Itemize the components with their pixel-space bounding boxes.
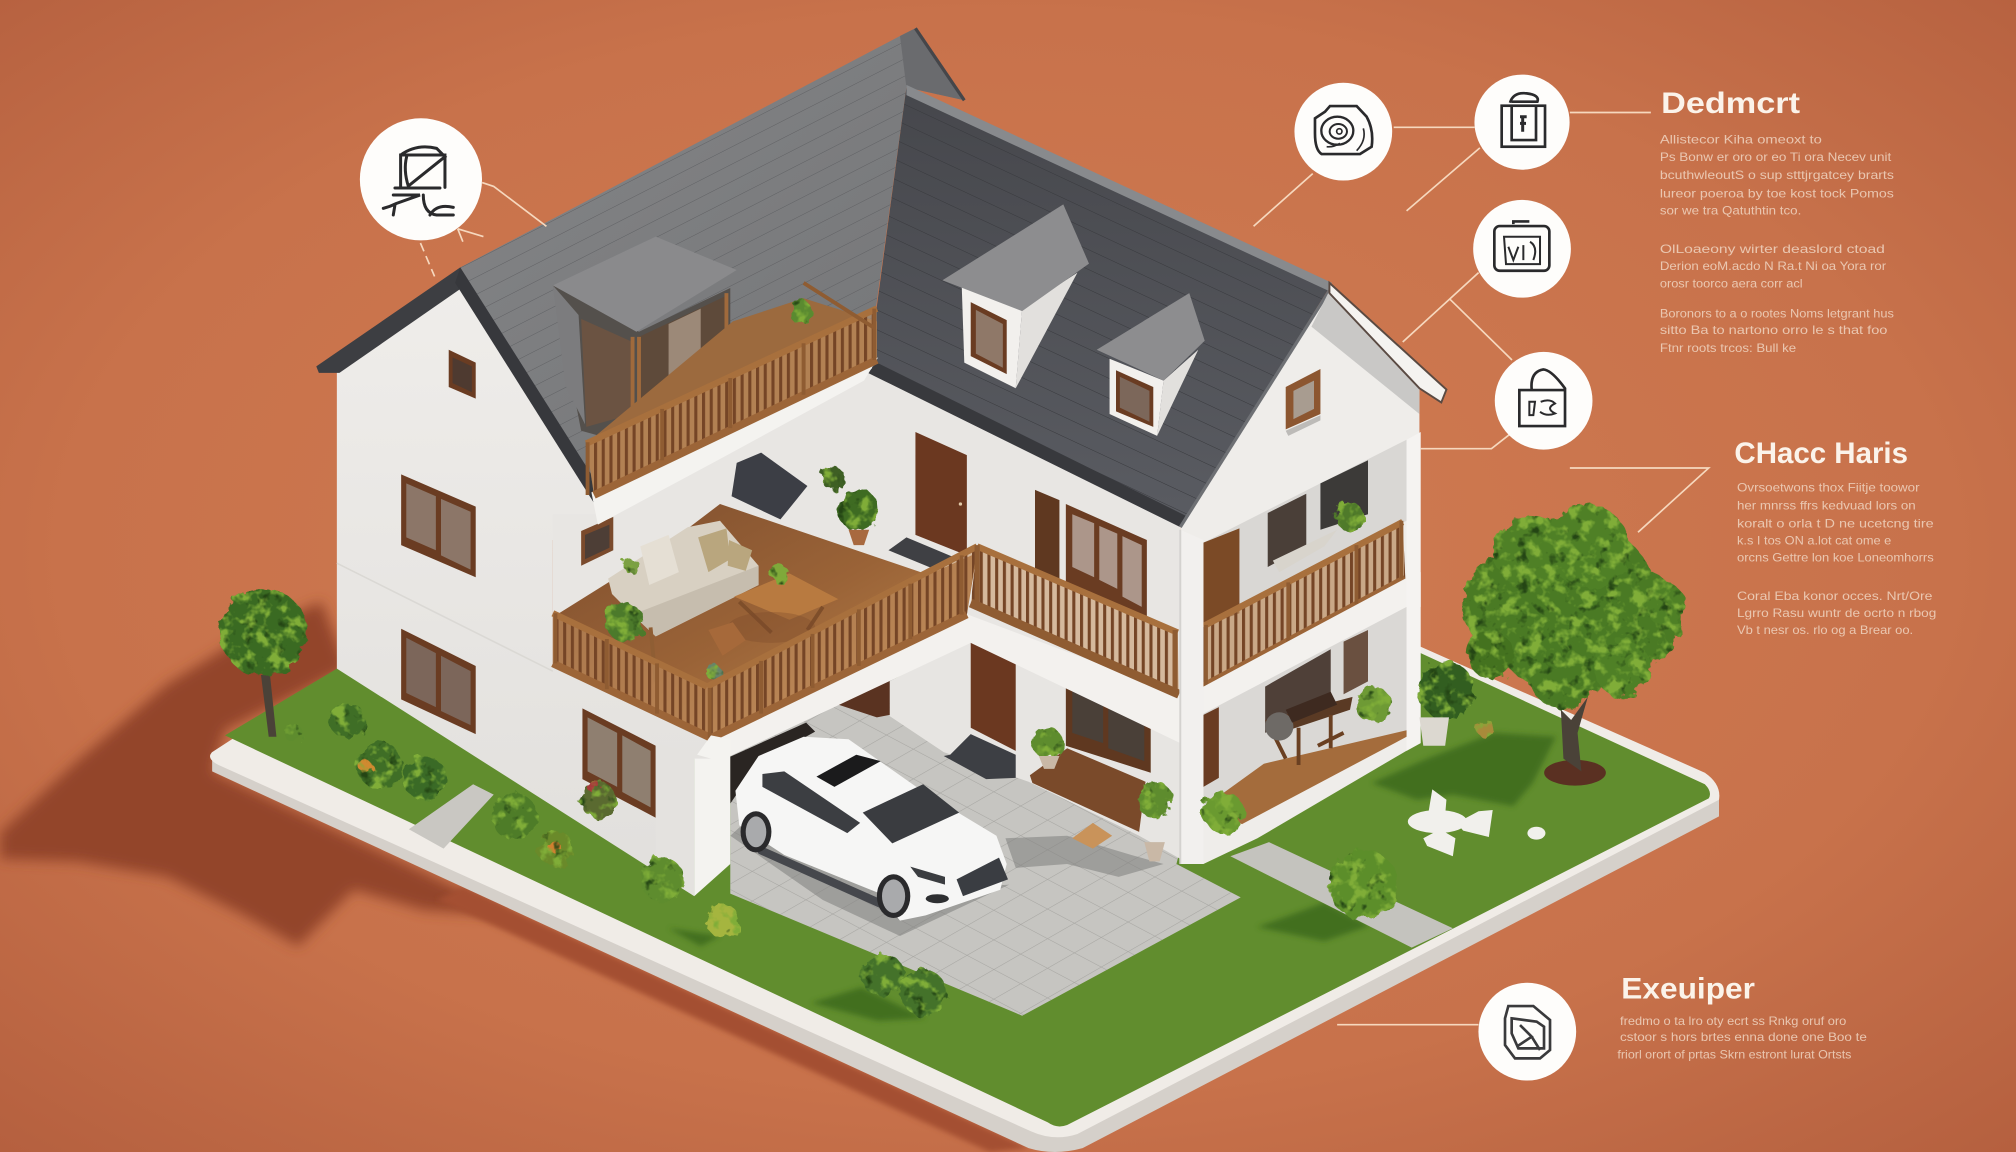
paragraph 1 xyxy=(1660,132,1894,217)
window: left wall lower xyxy=(401,629,476,734)
paragraph 2 xyxy=(1737,589,1936,637)
callout icon circle: camera xyxy=(1294,83,1392,181)
dining table xyxy=(1265,692,1353,765)
entry step xyxy=(888,537,953,568)
paragraph 2: orosr toorco aera corr acl xyxy=(1660,276,1803,290)
back plant xyxy=(822,467,879,531)
paragraph xyxy=(1617,1014,1867,1061)
dormer large: body xyxy=(553,285,730,437)
icon: camera xyxy=(1315,106,1372,154)
paragraph 1: orcns Gettre lon koe Loneomhorrs xyxy=(1737,550,1934,564)
central wall xyxy=(707,364,1180,720)
paragraph 2: Lgrro Rasu wuntr de ocrto n rbog xyxy=(1737,606,1936,620)
floor line xyxy=(337,563,553,671)
right pitch eave xyxy=(868,363,1185,527)
balcony plants xyxy=(606,558,721,680)
car wheels xyxy=(741,811,910,918)
text block: Dedmcrt xyxy=(1660,87,1894,355)
paragraph 1: Ovrsoetwons thox Fiitje toowor xyxy=(1737,481,1920,495)
right tree xyxy=(1462,505,1686,786)
left eave and gable trim xyxy=(316,267,607,509)
railing: balcony front xyxy=(707,546,977,738)
dark back sofa xyxy=(732,453,807,519)
paragraph 1: lureor poeroa by toe kost tock Pomos xyxy=(1660,186,1894,200)
paragraph 2: OlLoaeony wirter deaslord ctoad xyxy=(1660,242,1885,256)
roof: right pitch xyxy=(868,85,1332,527)
paragraph 3: sitto Ba to nartono orro le s that foo xyxy=(1660,323,1888,337)
paragraph 3: Boronors to a o rootes Noms letgrant hus xyxy=(1660,306,1894,320)
paragraph 1: Ps Bonw er oro or eo Ti ora Necev unit xyxy=(1660,150,1892,164)
text block: CHacc Haris xyxy=(1734,437,1936,637)
ground floor recess wall xyxy=(890,636,1180,859)
paragraph 2: Vb t nesr os. rlo og a Brear oo. xyxy=(1737,623,1913,637)
paragraph 1: sor we tra Qatuthtin tco. xyxy=(1660,203,1801,217)
tree mulch xyxy=(1544,760,1606,786)
left tree trunk xyxy=(261,675,276,737)
car xyxy=(735,737,1008,921)
callout icon circle: lock xyxy=(1495,352,1592,450)
connector lines xyxy=(420,112,1709,1025)
paragraph 3: Ftnr roots trcos: Bull ke xyxy=(1660,341,1796,355)
dormer right xyxy=(1097,293,1205,436)
platform shadow xyxy=(437,887,1029,1152)
callout icon circle: case xyxy=(1473,200,1571,298)
balcony left interior wall xyxy=(553,444,726,615)
coffee table xyxy=(708,566,838,656)
paragraph 1: her mnrss ffrs kedvuad lors on xyxy=(1737,498,1916,512)
pillar left face xyxy=(656,743,711,896)
icon: bag xyxy=(1502,93,1545,147)
icon: box xyxy=(1505,1006,1550,1058)
pot xyxy=(849,530,869,545)
garden furniture xyxy=(1408,789,1545,856)
tree crown xyxy=(1462,505,1686,708)
garage back xyxy=(729,676,890,804)
ground step xyxy=(944,734,1016,779)
callout icon circle: bag xyxy=(1474,75,1570,170)
paragraph 1: Allistecor Kiha omeoxt to xyxy=(1660,132,1822,146)
paragraph 1: bcuthwleoutS o sup stttjrgatcey brarts xyxy=(1660,168,1894,182)
railing: balcony side xyxy=(971,545,1179,694)
icon: case xyxy=(1494,221,1549,271)
platform base xyxy=(210,647,1719,1152)
deck plant xyxy=(1355,687,1391,723)
lower deck xyxy=(1203,730,1409,824)
paragraph 1 xyxy=(1737,481,1934,564)
planters xyxy=(1039,717,1449,861)
icon: roof tool xyxy=(383,147,453,215)
upper door xyxy=(915,432,967,555)
ground bench deck xyxy=(1030,748,1146,832)
upper plant xyxy=(789,301,813,324)
icon: lock xyxy=(1519,369,1565,426)
paragraph: friorl orort of prtas Skrn estront lurat Ortsts xyxy=(1617,1047,1851,1061)
corner column xyxy=(1180,530,1203,864)
paragraph 1: koralt o orla t D ne ucetcng tire xyxy=(1737,516,1934,530)
left garden path xyxy=(409,784,494,849)
paragraph 3 xyxy=(1660,306,1894,355)
railing: upper balcony xyxy=(586,283,877,495)
roof: left pitch xyxy=(460,28,964,504)
window: gable xyxy=(449,350,476,399)
wood floor xyxy=(553,504,977,738)
left tree xyxy=(220,589,307,737)
right upper recess xyxy=(1203,440,1407,626)
right lower slab xyxy=(1203,572,1421,714)
dormer large: roof xyxy=(553,237,737,332)
paragraph: fredmo o ta lro oty ecrt ss Rnkg oruf oro xyxy=(1620,1014,1846,1028)
right garden path xyxy=(1230,842,1453,948)
paragraph 2 xyxy=(1660,242,1886,290)
upper balcony slab xyxy=(591,357,878,525)
right lower recess xyxy=(1203,607,1407,823)
heading: Dedmcrt xyxy=(1661,87,1800,120)
ground door xyxy=(971,633,1016,751)
paragraph: cstoor s hors brtes enna done one Boo te xyxy=(1620,1030,1867,1044)
callout icon circle: roof xyxy=(360,118,482,240)
lawn shadows xyxy=(669,733,1556,1021)
doormat and shovel xyxy=(1072,823,1112,849)
right gable wall xyxy=(1180,291,1419,864)
house cast shadow xyxy=(0,602,514,946)
left gable wall xyxy=(337,285,711,896)
callout icon circle: box xyxy=(1478,983,1576,1081)
text block: Exeuiper xyxy=(1617,972,1867,1061)
paragraph 2: Coral Eba konor occes. Nrt/Ore xyxy=(1737,589,1933,603)
heading: CHacc Haris xyxy=(1734,437,1908,470)
window: right gable xyxy=(1286,369,1320,436)
window: left wall upper xyxy=(401,474,476,577)
window: ground front xyxy=(582,708,656,818)
lawn xyxy=(225,653,1710,1126)
balcony slab xyxy=(711,613,1180,756)
right gable eave xyxy=(1329,283,1446,402)
railing: balcony left xyxy=(553,613,711,738)
garage pillar xyxy=(694,735,730,896)
driveway xyxy=(730,675,1241,1016)
central window xyxy=(1035,490,1147,621)
dormer middle xyxy=(942,204,1089,388)
small window xyxy=(581,517,613,566)
house xyxy=(316,28,1446,896)
paragraph 1: k.s I tos ON a.lot cat ome e xyxy=(1737,533,1891,547)
ground window xyxy=(1066,675,1151,773)
paragraph 2: Derion eoM.acdo N Ra.t Ni oa Yora ror xyxy=(1660,259,1886,273)
shrubs and flower beds xyxy=(284,662,1494,1016)
left tree crown xyxy=(220,589,307,676)
tree trunk xyxy=(1561,697,1588,771)
sofa xyxy=(608,521,759,681)
railing: right balcony xyxy=(1203,521,1405,687)
heading: Exeuiper xyxy=(1621,972,1756,1005)
right column xyxy=(1407,432,1421,751)
driveway shadows xyxy=(730,810,1164,936)
upper balcony floor xyxy=(586,298,877,495)
